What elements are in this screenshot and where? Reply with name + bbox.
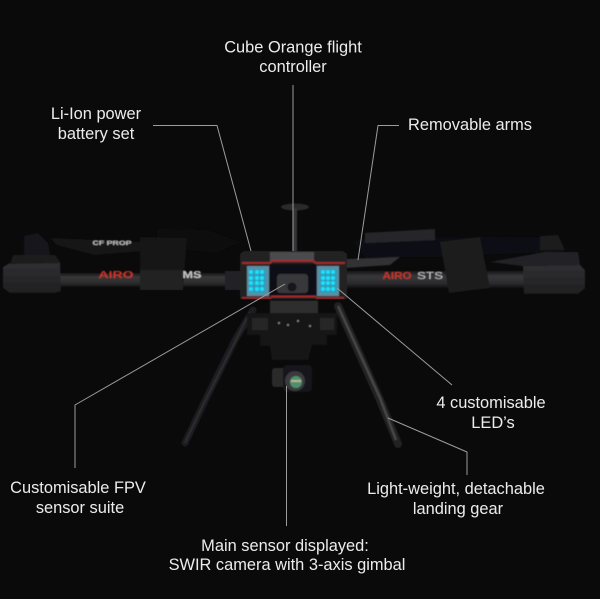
label: arms: Removable arms <box>408 116 532 134</box>
label: main sensor: Main sensor displayed: <box>201 537 369 555</box>
drone <box>3 204 585 444</box>
leader lines <box>75 85 467 526</box>
line: flight controller <box>292 85 294 251</box>
line: arms <box>358 126 399 260</box>
label: landing gear: Light-weight, detachable <box>367 480 545 498</box>
arm logo text: AIRO <box>382 271 412 282</box>
line: battery <box>153 126 251 251</box>
label: landing gear: landing gear <box>413 500 504 518</box>
right LED panel <box>317 266 339 296</box>
line: main sensor <box>286 386 288 526</box>
label: main sensor: SWIR camera with 3-axis gimbal <box>169 556 405 574</box>
label: flight controller: Cube Orange flight <box>224 38 362 56</box>
label: FPV sensor: Customisable FPV <box>10 479 146 497</box>
arm logo text: MS <box>182 270 202 281</box>
label: LEDs: LED’s <box>471 414 515 432</box>
line: FPV sensor <box>75 284 285 468</box>
camera <box>272 365 312 392</box>
mast antenna <box>281 204 309 252</box>
arm logo text: STS <box>417 271 443 282</box>
label: FPV sensor: sensor suite <box>36 499 124 517</box>
left LED panel <box>247 266 269 296</box>
label: flight controller: controller <box>259 58 327 76</box>
arm logo text: AIRO <box>98 270 134 281</box>
label: battery: Li-Ion power <box>51 105 141 123</box>
line: LEDs <box>337 288 452 385</box>
left arm <box>3 229 240 293</box>
line: landing gear <box>388 418 467 475</box>
right arm <box>345 229 585 294</box>
right landing leg <box>338 306 398 444</box>
label: battery: battery set <box>58 125 135 143</box>
central body <box>240 251 347 299</box>
left landing leg <box>185 310 253 443</box>
gimbal and lower body <box>247 300 337 360</box>
arm logo text <box>92 241 202 281</box>
arm logo text <box>382 271 443 282</box>
label: LEDs: 4 customisable <box>436 394 546 412</box>
arm logo text: CF PROP <box>92 241 132 247</box>
